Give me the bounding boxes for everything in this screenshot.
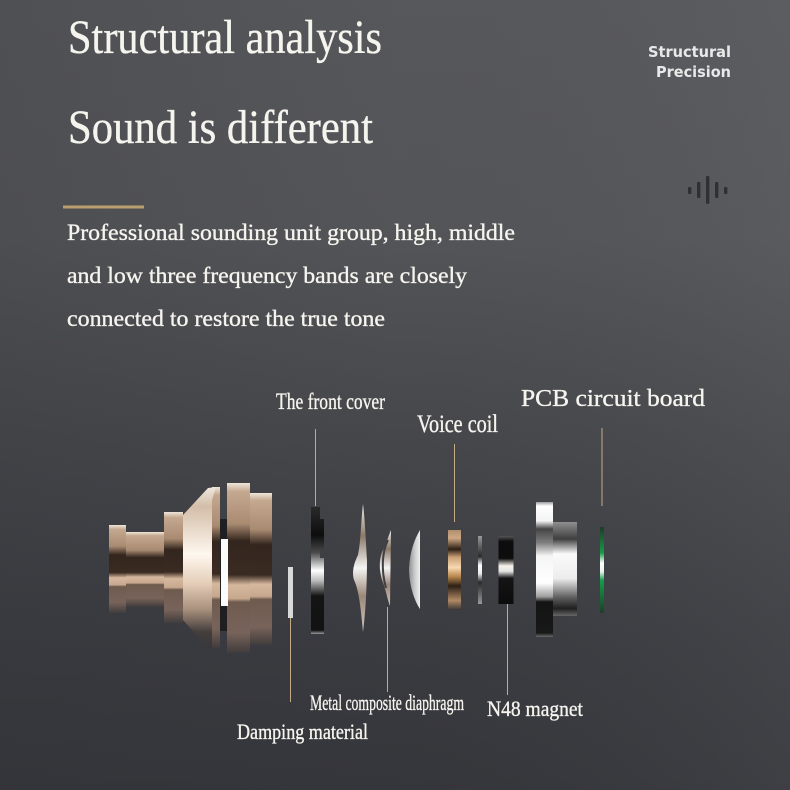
earphone driver exploded view: [109, 483, 604, 653]
PCB board: [600, 527, 604, 613]
label: Voice coil: Voice coil: [417, 411, 498, 438]
heading: Structural Precision: Structural: [648, 43, 731, 61]
label: Metal composite diaphragm: Metal composite diaphragm: [310, 690, 464, 715]
description text: and low three frequency bands are closely: [67, 263, 467, 289]
label: PCB circuit board: PCB circuit board: [521, 386, 705, 412]
damping disc: [288, 567, 293, 618]
title: Structural analysis: [68, 11, 382, 64]
metal composite diaphragm: [380, 530, 391, 606]
copper housing: [109, 483, 272, 653]
heading: Structural Precision: Precision: [656, 63, 731, 81]
front cover disc: [311, 507, 324, 634]
thin ring: [478, 536, 482, 604]
label: The front cover: The front cover: [276, 389, 385, 414]
icon: sound wave: [688, 176, 727, 204]
heading: Structural Precision: [648, 43, 731, 81]
steel cup: [536, 502, 577, 637]
description text: Professional sounding unit group, high, middle: [67, 220, 515, 246]
label: Damping material: Damping material: [237, 719, 368, 744]
label: N48 magnet: N48 magnet: [487, 696, 583, 721]
diaphragm 1: [353, 504, 367, 632]
description text: connected to restore the true tone: [67, 306, 385, 332]
title: Sound is different: [68, 101, 374, 154]
description text: [67, 220, 515, 332]
gold accent bar: [63, 206, 144, 208]
leader lines: [290, 428, 602, 702]
N48 magnet: [498, 536, 514, 604]
title: [68, 11, 382, 154]
voice coil: [448, 530, 461, 610]
dome: [409, 530, 420, 609]
